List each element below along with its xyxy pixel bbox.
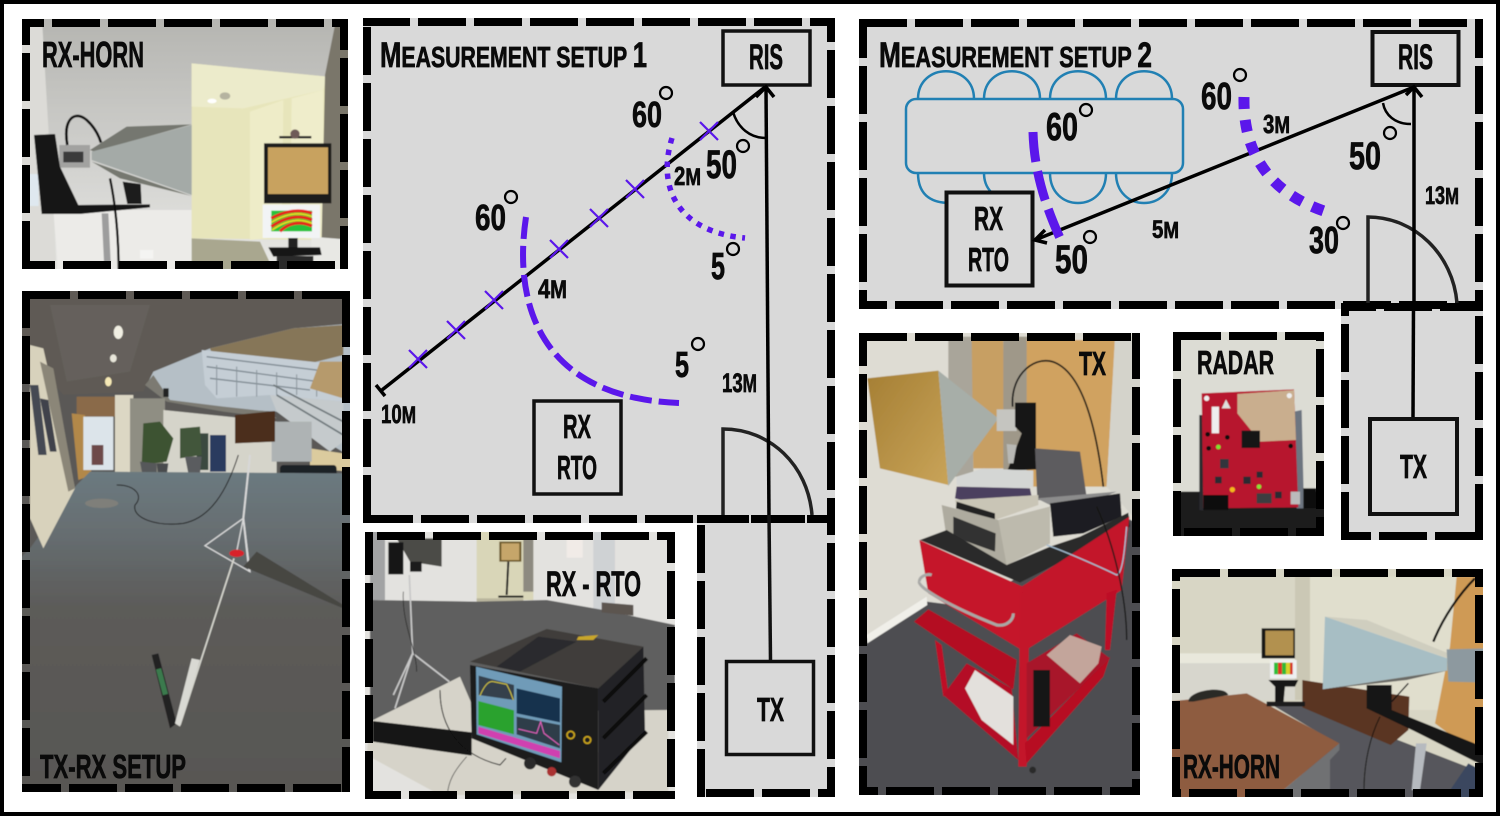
angle labels: 5 bbox=[711, 246, 725, 288]
label: RX-HORN room: RX-HORN bbox=[1183, 748, 1280, 785]
panel: TX stub setup 1 bbox=[697, 515, 835, 797]
TX box bbox=[726, 662, 814, 754]
heading: measurement setup 1: MEASUREMENT SETUP 1 bbox=[380, 36, 647, 75]
RX RTO box: RTO bbox=[557, 449, 597, 486]
distance labels bbox=[381, 161, 757, 429]
arc: 5m bbox=[1033, 132, 1060, 238]
arc: 2m bbox=[667, 138, 745, 238]
distance labels: 3M bbox=[1263, 109, 1290, 139]
distance labels: 4M bbox=[538, 274, 567, 304]
border: RX-RTO bbox=[365, 532, 675, 799]
angle labels: 50 bbox=[1055, 238, 1088, 282]
line: TX feed bbox=[769, 515, 770, 661]
TX box: TX bbox=[757, 691, 784, 728]
RX RTO box: RX bbox=[974, 200, 1003, 237]
arc: 4m bbox=[523, 217, 679, 403]
RX RTO box bbox=[946, 192, 1032, 286]
RIS box: RIS bbox=[1398, 38, 1433, 77]
door bbox=[723, 429, 812, 515]
RIS box bbox=[1372, 32, 1458, 85]
arrow: TX to RIS bbox=[766, 88, 769, 519]
heading: measurement setup 2: MEASUREMENT SETUP 2 bbox=[879, 36, 1152, 75]
distance labels: 13M bbox=[722, 368, 757, 398]
RIS box bbox=[723, 31, 810, 85]
RX RTO box: RTO bbox=[968, 241, 1009, 278]
photo: RX-horn room bbox=[1168, 567, 1487, 800]
angle labels: 60 bbox=[475, 197, 506, 238]
angle labels: 30 bbox=[1309, 220, 1339, 262]
border: radar bbox=[1173, 332, 1324, 536]
panel: measurement setup 1 bbox=[363, 18, 835, 523]
label: RADAR: RADAR bbox=[1197, 344, 1274, 381]
RX RTO box bbox=[534, 401, 621, 494]
arrow: TX to RIS bbox=[1412, 88, 1416, 305]
label: TX: TX bbox=[1079, 345, 1106, 382]
meeting table with chairs bbox=[906, 71, 1183, 203]
door bbox=[1368, 217, 1457, 303]
angle labels: 50 bbox=[706, 143, 737, 187]
border: RX-horn room bbox=[1172, 569, 1483, 797]
border: RX-horn bbox=[22, 19, 348, 269]
panel: TX stub setup 2 bbox=[1341, 303, 1483, 540]
distance labels: 5M bbox=[1152, 216, 1179, 244]
RX RTO box: RX bbox=[563, 408, 591, 445]
label: RX-HORN: RX-HORN bbox=[42, 34, 144, 75]
angle labels: 60 bbox=[1201, 76, 1232, 118]
photo: RX-RTO oscilloscope bbox=[362, 528, 678, 802]
label: TX-RX SETUP: TX-RX SETUP bbox=[40, 748, 186, 785]
TX box bbox=[1370, 419, 1457, 514]
angle labels: 50 bbox=[1349, 135, 1381, 178]
angle labels: 60 bbox=[632, 94, 662, 135]
arrow: RIS to RX bbox=[1035, 87, 1422, 243]
angle labels: 5 bbox=[675, 344, 689, 385]
RIS box: RIS bbox=[749, 38, 783, 77]
TX box: TX bbox=[1400, 448, 1427, 485]
distance labels: 13M bbox=[1425, 182, 1459, 210]
measurement crosses bbox=[409, 122, 718, 368]
label: RX - RTO: RX - RTO bbox=[546, 565, 641, 604]
arrow: RIS to 10m radial bbox=[376, 87, 774, 396]
arc: 3m bbox=[1244, 97, 1330, 213]
distance labels bbox=[1152, 109, 1459, 244]
border: TX-RX setup bbox=[22, 291, 350, 792]
border: TX photo bbox=[859, 333, 1140, 795]
distance labels: 2M bbox=[674, 161, 701, 191]
photo: TX trolley bbox=[855, 330, 1145, 798]
angle labels: 60 bbox=[1046, 106, 1078, 149]
distance labels: 10M bbox=[381, 399, 416, 429]
angle labels bbox=[1046, 69, 1396, 282]
photo: radar board bbox=[1170, 328, 1330, 538]
angle labels bbox=[475, 87, 749, 385]
panel: measurement setup 2 bbox=[859, 19, 1483, 309]
photo: RX-horn top left bbox=[17, 13, 353, 273]
line: TX feed bbox=[1411, 303, 1415, 418]
photo: TX-RX setup bbox=[17, 287, 353, 797]
